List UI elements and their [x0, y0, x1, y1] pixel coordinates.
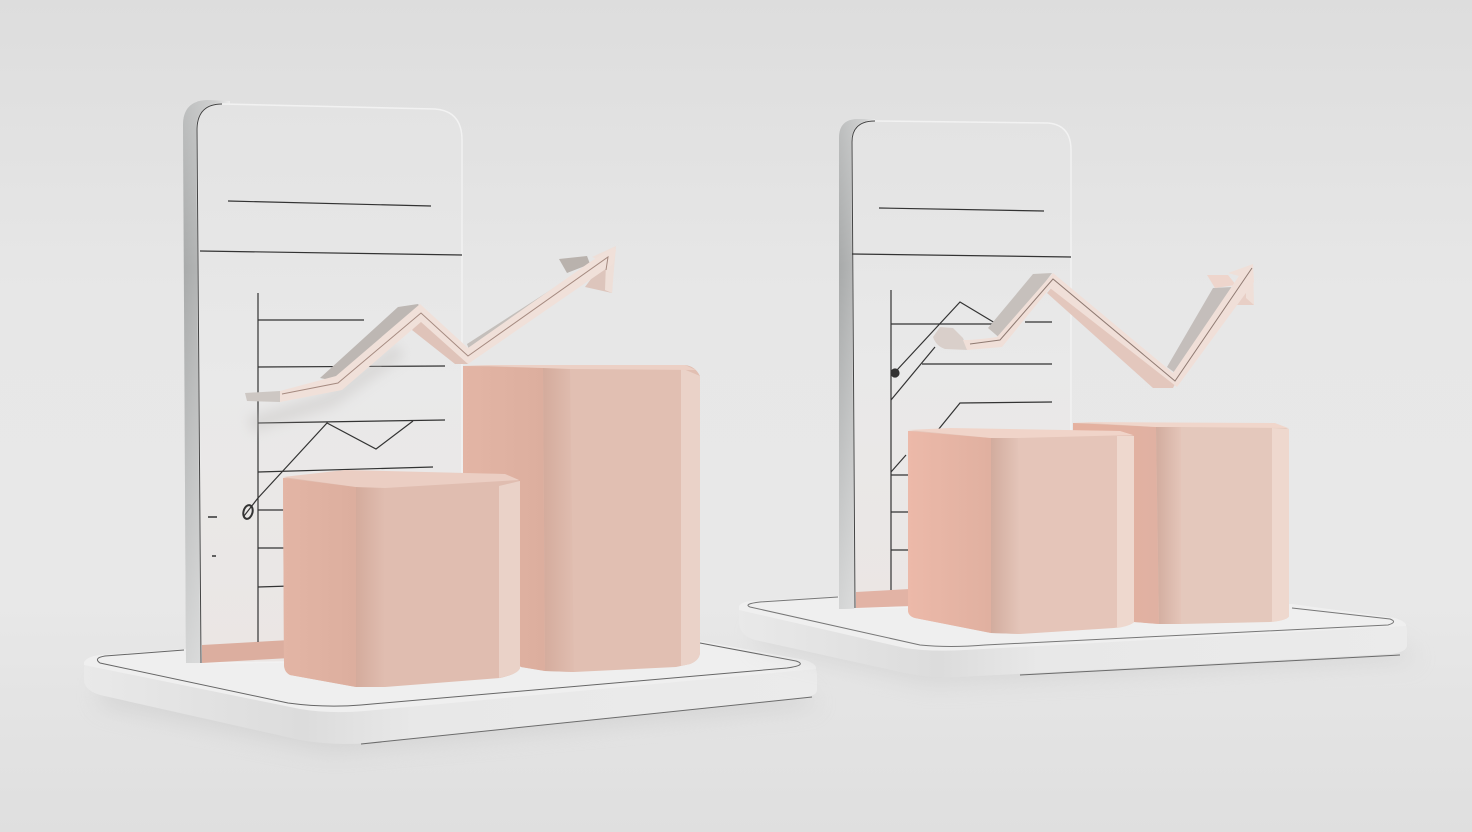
left panel pink base: [202, 640, 290, 663]
model: right chart: [739, 119, 1420, 685]
left tall bar: [463, 365, 700, 672]
left panel rules: [200, 201, 462, 255]
model: left chart: [84, 100, 820, 752]
left line chart: [208, 293, 445, 642]
right line chart: [891, 290, 1052, 590]
right front bar: [908, 428, 1134, 634]
right panel rules: [852, 208, 1071, 257]
right platform: [739, 596, 1420, 685]
right zigzag arrow: [933, 264, 1254, 388]
left short bar: [283, 470, 520, 687]
left platform: [84, 641, 820, 752]
right back bar: [1073, 422, 1289, 624]
right panel pink base: [856, 589, 910, 608]
left phone panel: [183, 100, 462, 663]
left rising arrow: [245, 246, 616, 425]
right phone panel: [839, 119, 1071, 609]
